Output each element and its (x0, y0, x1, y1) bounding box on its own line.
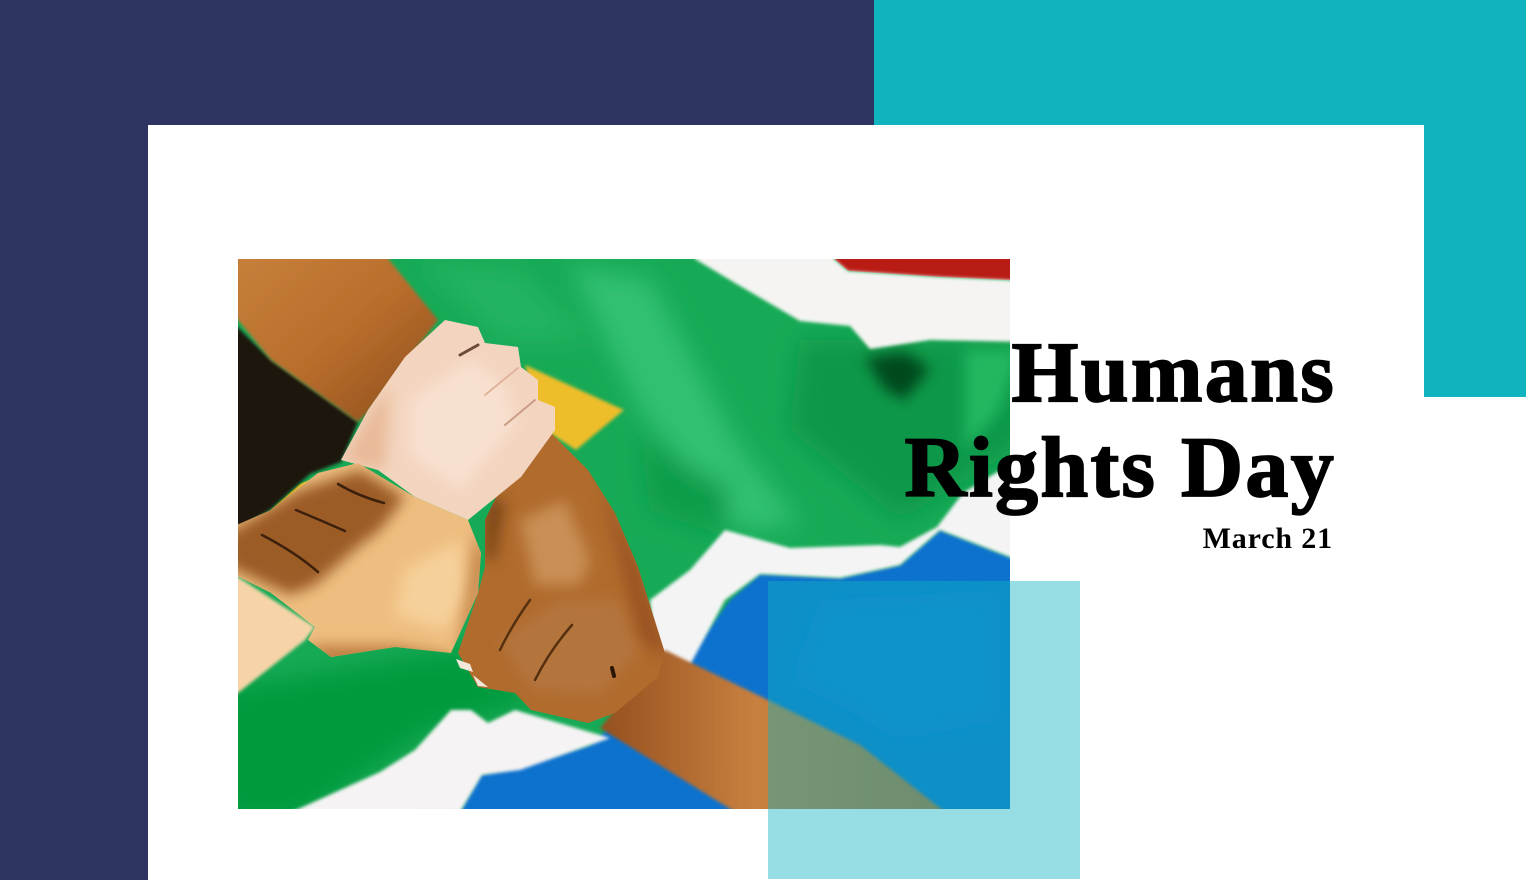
fingernails (456, 659, 488, 687)
subtitle: date: March 21 (1203, 522, 1333, 555)
panel: white card (148, 125, 1424, 880)
panel: navy background block (0, 0, 874, 880)
flag: red band (834, 240, 1030, 281)
hand: dark hand lower right (458, 434, 665, 723)
translucent teal square (768, 581, 1080, 879)
flag: white band lower (650, 452, 1030, 665)
hand details: knuckle creases and fingers (262, 345, 614, 680)
hand: tan hand on left (238, 463, 481, 657)
title: Rights Day (904, 419, 1336, 515)
flag: blue field (450, 530, 1030, 830)
flag: white band top (695, 240, 1030, 349)
arm: top left forearm (220, 240, 438, 422)
flag: white band bottom left (285, 710, 610, 815)
panel: teal background block (874, 0, 1526, 397)
arm: lower right forearm (600, 650, 945, 812)
flag: dark panel at left (220, 310, 358, 540)
photo: joined hands over South African flag (238, 259, 1010, 809)
arm: pale forearm at left edge (220, 570, 315, 705)
title: Humans (1012, 324, 1336, 420)
title (904, 324, 1336, 516)
flag: yellow triangle (525, 365, 624, 450)
flag: green field (200, 220, 1050, 840)
hand: light hand on top (335, 315, 560, 525)
